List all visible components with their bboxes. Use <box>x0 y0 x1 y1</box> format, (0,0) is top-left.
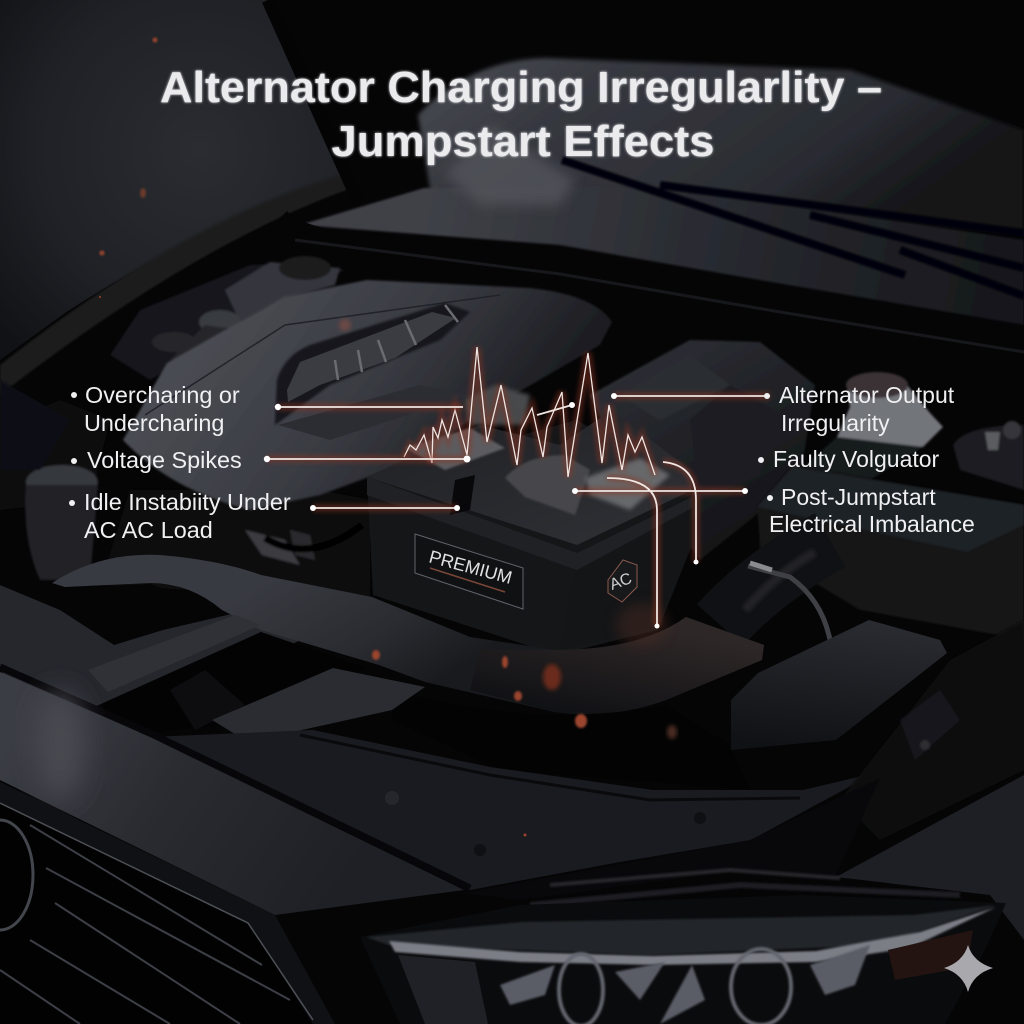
lower radiator panel <box>150 730 875 890</box>
cowl rubber seal <box>283 215 1024 335</box>
title: Jumpstart Effects <box>332 117 714 166</box>
battery PREMIUM badge: PREMIUM <box>427 547 514 588</box>
engine cover <box>123 280 612 510</box>
left engine parts <box>0 256 370 600</box>
front grille with emblem <box>0 782 335 1024</box>
label: idle instability <box>69 489 291 543</box>
label: voltage spikes: Voltage Spikes <box>87 447 242 473</box>
right dark bay <box>840 620 1024 840</box>
battery AC hexagon logo <box>608 560 637 602</box>
label: alternator output: Alternator Output <box>779 382 955 408</box>
air filter box <box>757 465 1024 640</box>
label: alternator output: Irregularity <box>781 410 890 436</box>
right labels <box>758 382 975 537</box>
icon: sparkle watermark <box>944 945 993 992</box>
strut tower right <box>953 421 1024 490</box>
large air duct <box>52 555 764 714</box>
right block <box>731 620 947 750</box>
left slab <box>0 585 300 760</box>
title <box>160 63 882 166</box>
label: alternator output <box>764 382 955 436</box>
hood strut <box>268 0 358 200</box>
label: overcharging: Undercharing <box>84 410 224 436</box>
black arch under duct <box>65 584 222 644</box>
hood rim <box>0 172 358 395</box>
hood lip <box>464 778 960 905</box>
windshield glare <box>445 125 575 205</box>
front hood panel <box>0 667 470 915</box>
dark garage backdrop <box>0 0 353 360</box>
air intake hose <box>720 540 830 640</box>
battery <box>367 385 692 655</box>
label: post-jumpstart: Electrical Imbalance <box>769 511 975 537</box>
connector lines <box>264 393 770 628</box>
label: idle instability: AC AC Load <box>84 517 213 543</box>
cowl panel <box>300 186 1024 325</box>
headlight <box>360 895 1006 1024</box>
battery AC hexagon logo: AC <box>608 570 634 594</box>
title: Alternator Charging Irregularlity – <box>160 63 882 112</box>
right fuse box <box>590 340 815 560</box>
right fender <box>836 775 1024 940</box>
lower bracket <box>212 668 425 742</box>
label: post-jumpstart <box>767 484 975 537</box>
wiper arms <box>562 160 1024 296</box>
label: idle instability: Idle Instabiity Under <box>84 489 291 515</box>
black engine gap <box>92 632 366 732</box>
label: post-jumpstart: Post-Jumpstart <box>781 484 936 510</box>
ember sparks <box>99 38 677 836</box>
label: faulty regulator: Faulty Volguator <box>773 446 940 472</box>
windshield <box>418 58 1024 235</box>
upper bracket <box>88 615 261 692</box>
label: overcharging <box>71 382 240 436</box>
brake fluid reservoir <box>800 372 943 480</box>
battery PREMIUM badge <box>415 534 523 609</box>
label: overcharging: Overcharing or <box>85 382 240 408</box>
left labels <box>69 382 291 543</box>
voltage waveform over battery <box>404 347 655 477</box>
vent slot <box>275 303 470 425</box>
black gap under duct <box>392 690 750 790</box>
